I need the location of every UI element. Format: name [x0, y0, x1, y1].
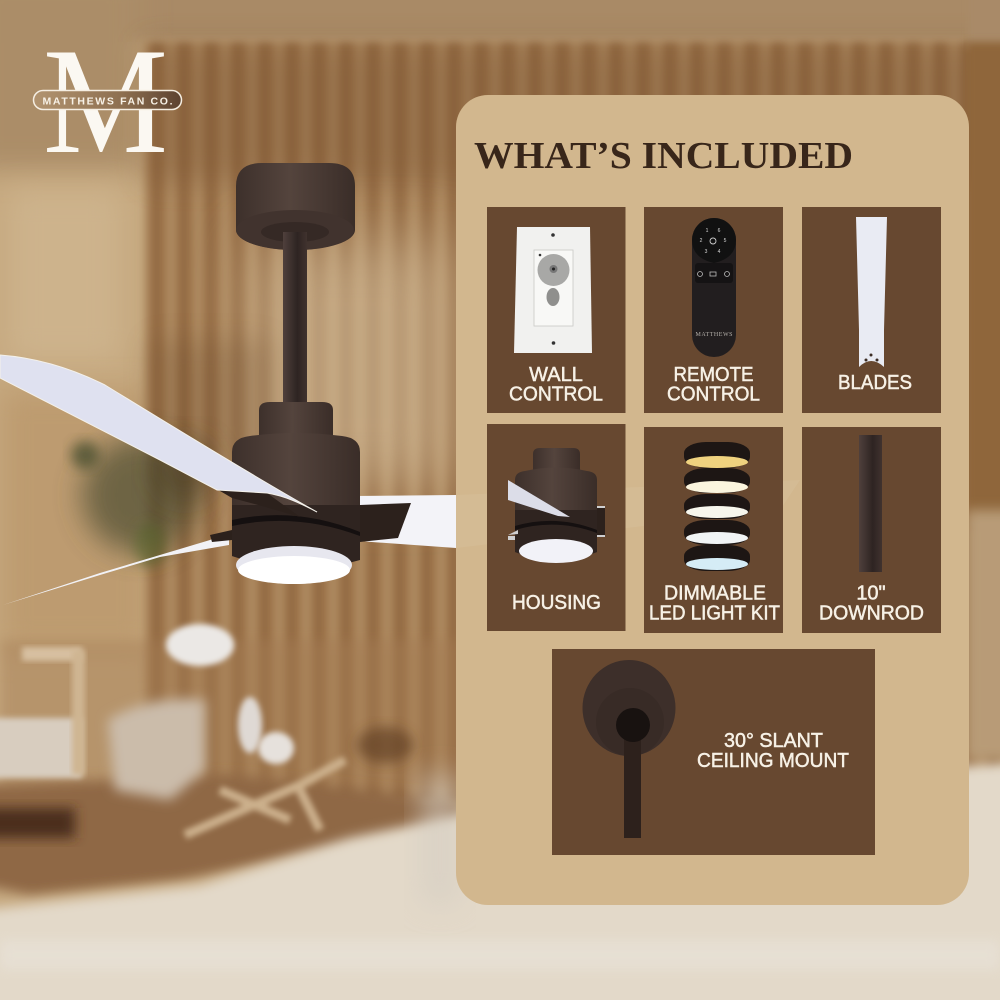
canopy	[236, 163, 355, 250]
label	[649, 582, 780, 624]
icon: blade	[856, 217, 887, 367]
ceiling fan product photo	[0, 163, 456, 605]
card: downrod	[802, 427, 941, 633]
icon: remote: 6	[718, 228, 721, 234]
blade bracket left	[215, 488, 300, 517]
right fan blade	[353, 495, 456, 548]
label: 10"	[856, 582, 886, 604]
icon: slant mount	[582, 660, 676, 838]
icon: remote: 2	[700, 238, 703, 244]
heading: WHAT’S INCLUDED	[474, 135, 853, 177]
label: 30° SLANT	[724, 730, 823, 752]
motor collar	[259, 402, 333, 444]
small wing lower-left	[210, 530, 232, 542]
label	[509, 364, 603, 406]
logo: Matthews Fan Co.: M	[43, 17, 168, 185]
card: wall control	[487, 207, 626, 413]
icon: remote: 3	[705, 249, 708, 255]
card: housing	[487, 424, 626, 631]
upper-left fan blade	[0, 355, 317, 512]
card: dimmable LED light kit	[644, 427, 783, 633]
label	[697, 730, 849, 772]
card: blades	[802, 207, 941, 413]
logo: Matthews Fan Co.: MATTHEWS FAN CO.	[42, 96, 173, 108]
LED light	[236, 546, 352, 584]
icon: remote: 1	[706, 228, 709, 234]
icon: housing	[508, 448, 605, 563]
lower-left fan blade	[3, 531, 229, 605]
blade bracket right	[360, 503, 411, 542]
icon: remote	[692, 218, 736, 357]
label: REMOTE	[674, 364, 754, 386]
icon: remote: 5	[724, 238, 727, 244]
label	[819, 582, 924, 624]
label: HOUSING	[512, 592, 601, 614]
label	[667, 364, 760, 406]
panel: what's included	[456, 95, 969, 905]
icon: LED disc stack	[684, 442, 750, 571]
icon: downrod	[859, 435, 882, 572]
icon: remote: MATTHEWS	[696, 332, 732, 338]
icon: remote: 4	[718, 249, 721, 255]
downrod	[283, 232, 307, 402]
label: DIMMABLE	[664, 582, 766, 604]
label: BLADES	[838, 372, 912, 394]
label: DOWNROD	[819, 602, 924, 624]
label: CEILING MOUNT	[697, 750, 849, 772]
label: CONTROL	[667, 384, 760, 406]
label: CONTROL	[509, 384, 603, 406]
label: WALL	[529, 364, 583, 386]
card: remote control	[644, 207, 783, 413]
faint blade reflection	[456, 480, 800, 548]
card: slant ceiling mount	[552, 649, 875, 855]
icon: wall control	[514, 227, 592, 353]
label: LED LIGHT KIT	[649, 602, 780, 624]
motor housing	[232, 433, 360, 567]
